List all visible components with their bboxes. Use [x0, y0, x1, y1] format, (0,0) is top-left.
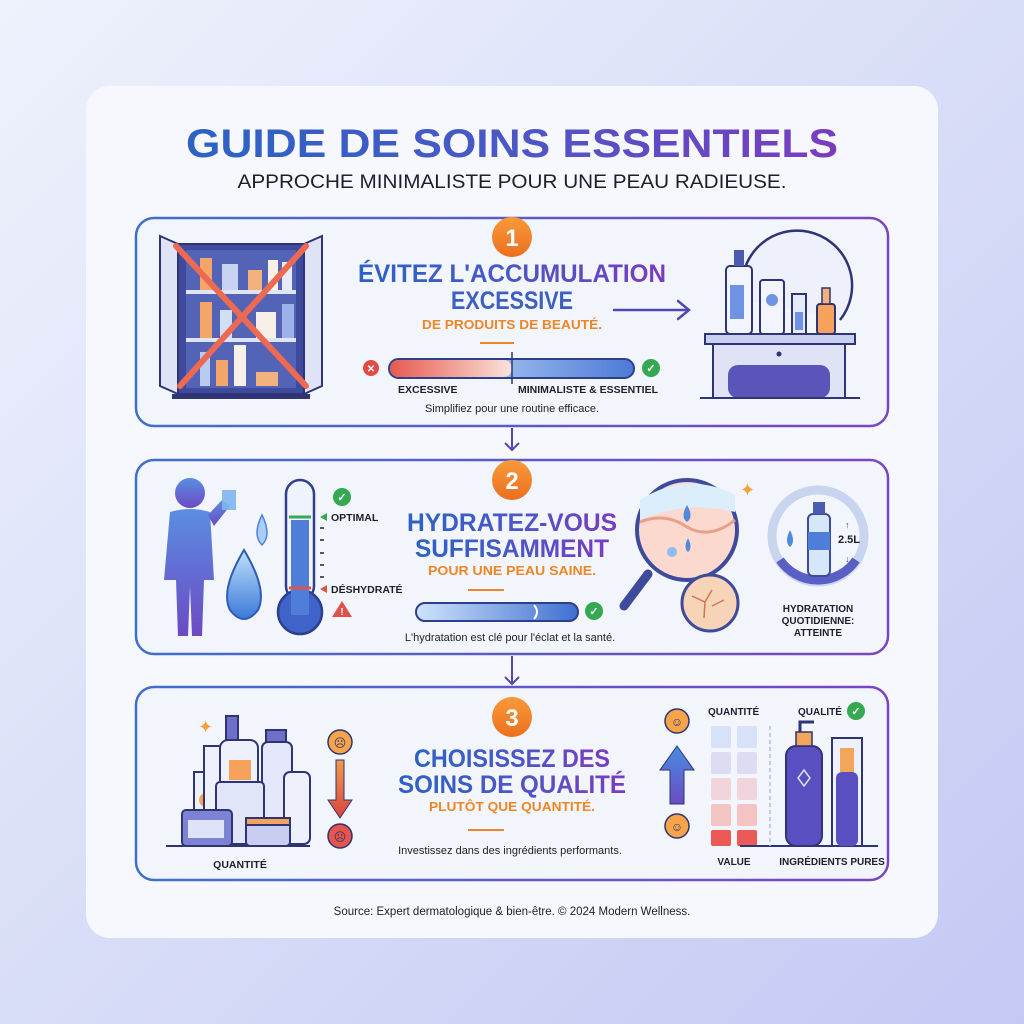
- panel: 3 quality: [136, 687, 888, 880]
- bar: excessive vs minimaliste: MINIMALISTE & ESSENTIEL: [518, 384, 659, 396]
- subtitle: APPROCHE MINIMALISTE POUR UNE PEAU RADIEUSE.: [238, 172, 786, 193]
- card: [86, 86, 938, 938]
- bar: hydration: [416, 602, 603, 621]
- label: hydration quotidienne: [782, 604, 854, 639]
- icon: quality bottles: QUALITÉ: [798, 705, 842, 718]
- icon: quality bottles: [779, 702, 885, 868]
- source: Source: Expert dermatologique & bien-être. © 2024 Modern Wellness.: [334, 906, 690, 918]
- caption 2: L'hydratation est clé pour l'éclat et la santé.: [405, 632, 615, 644]
- icon: thermometer: DÉSHYDRATÉ: [331, 583, 403, 596]
- icon: water bottle ring: 2.5L: [838, 534, 860, 546]
- badge 2: [492, 460, 532, 500]
- heading 1: [358, 259, 666, 344]
- arrow right: [614, 301, 689, 319]
- label: hydration quotidienne: HYDRATATION: [783, 604, 853, 615]
- heading 1: DE PRODUITS DE BEAUTÉ.: [422, 317, 602, 332]
- icon: water bottle ring: ↓: [845, 554, 850, 564]
- caption 3: Investissez dans des ingrédients performants.: [398, 845, 622, 857]
- grid: quantité items: [708, 705, 878, 868]
- heading 1: ÉVITEZ L'ACCUMULATION: [358, 259, 666, 288]
- badge 1: 1: [505, 225, 519, 252]
- icon: sad faces + down arrow: ☹: [334, 736, 346, 750]
- bar: excessive vs minimaliste: ✕: [367, 364, 375, 375]
- label: hydration quotidienne: QUOTIDIENNE:: [782, 616, 854, 627]
- caption 1: Simplifiez pour une routine efficace.: [425, 403, 599, 415]
- icon: water drops: [227, 515, 267, 619]
- bar: hydration: ✓: [589, 606, 599, 618]
- heading 2: SUFFISAMMENT: [415, 535, 609, 563]
- icon: thermometer: OPTIMAL: [331, 512, 379, 524]
- bar: excessive vs minimaliste: EXCESSIVE: [398, 384, 458, 396]
- icon: vanity: [700, 231, 860, 398]
- icon: sad faces + down arrow: [328, 730, 352, 848]
- icon: water bottle ring: ↑: [845, 520, 850, 530]
- icon: thermometer: !: [340, 607, 344, 618]
- heading 3: CHOISISSEZ DES: [414, 745, 610, 773]
- panel: 1 accumulation: [136, 217, 888, 426]
- icon: sad faces + down arrow: ☹: [334, 830, 346, 844]
- badge 1: [492, 217, 532, 257]
- icon: thermometer: ✓: [337, 492, 347, 504]
- grid: quantité items: QUANTITÉ: [708, 705, 759, 718]
- panel: 3 quality: ✦: [198, 717, 213, 737]
- icon: water bottle ring: [772, 490, 864, 582]
- icon: crossed cabinet: [160, 236, 322, 399]
- icon: magnifier skin: [624, 480, 755, 631]
- bar: excessive vs minimaliste: ✓: [646, 363, 656, 375]
- arrow down 1: [505, 428, 519, 450]
- arrow down 2: [505, 656, 519, 684]
- heading 2: HYDRATEZ-VOUS: [407, 509, 617, 537]
- badge 2: 2: [505, 468, 519, 495]
- heading 2: POUR UNE PEAU SAINE.: [428, 563, 596, 578]
- icon: quality bottles: INGRÉDIENTS PURES: [779, 855, 885, 868]
- bar: excessive vs minimaliste: [363, 352, 660, 396]
- badge 3: [492, 697, 532, 737]
- heading 1: EXCESSIVE: [451, 287, 573, 315]
- heading 3: SOINS DE QUALITÉ: [398, 770, 626, 799]
- label quantité: QUANTITÉ: [213, 858, 267, 871]
- icon: up arrow smiles: [660, 709, 694, 838]
- icon: thermometer: [278, 480, 403, 634]
- heading 3: [398, 745, 626, 831]
- icon: magnifier skin: ✦: [740, 480, 755, 500]
- label: hydration quotidienne: ATTEINTE: [794, 628, 842, 639]
- icon: pile of products: [166, 716, 310, 846]
- icon: up arrow smiles: ☺: [671, 715, 683, 729]
- panel: 2 hydration: [136, 460, 888, 654]
- title: GUIDE DE SOINS ESSENTIELS: [186, 122, 838, 166]
- badge 3: 3: [505, 705, 519, 732]
- heading 3: PLUTÔT QUE QUANTITÉ.: [429, 799, 595, 814]
- icon: quality bottles: ✓: [851, 706, 861, 718]
- icon: up arrow smiles: ☺: [671, 820, 683, 834]
- heading 2: [407, 509, 617, 591]
- icon: person drinking: [164, 478, 236, 636]
- grid: quantité items: VALUE: [717, 857, 751, 868]
